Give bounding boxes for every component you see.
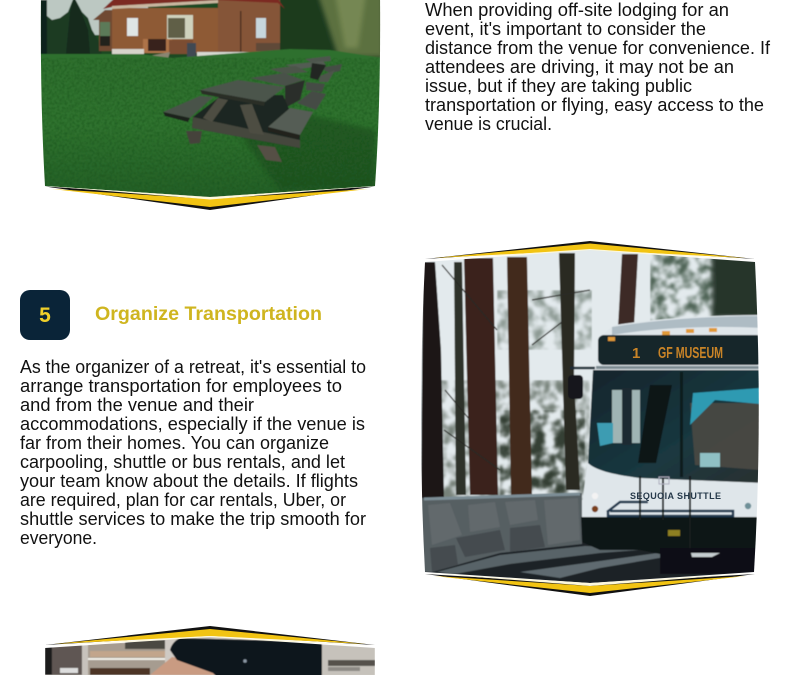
far picnic tables <box>250 56 342 110</box>
photo: shuttle bus among redwoods: GF MUSEUM <box>658 345 723 362</box>
text block: transportation: and from the venue and their <box>20 395 254 415</box>
background foliage <box>430 380 590 500</box>
stone wall <box>415 493 582 572</box>
photo: shuttle bus among redwoods <box>415 245 770 590</box>
text block: transportation: everyone. <box>20 528 97 548</box>
lodge <box>93 10 112 51</box>
number badge <box>20 290 70 340</box>
text block: off-site lodging: transportation or flying, easy access to the <box>425 95 764 115</box>
text block: off-site lodging: attendees are driving, it may not be an <box>425 57 734 77</box>
dark branches <box>442 265 590 470</box>
text block: transportation <box>20 357 366 548</box>
chevron: upper yellow band of bus photo <box>425 241 755 260</box>
text block: off-site lodging: venue is crucial. <box>425 114 552 134</box>
left trees <box>38 0 102 54</box>
head lamps <box>592 493 598 499</box>
text block: transportation: are required, plan for car rentals, Uber, or <box>20 490 346 510</box>
number badge: 5 <box>39 304 51 327</box>
text block: transportation: As the organizer of a retreat, it's essential to <box>20 357 366 377</box>
text block: off-site lodging: event, it's important to consider the <box>425 19 706 39</box>
text block: transportation: carpooling, shuttle or bus rentals, and let <box>20 452 345 472</box>
text block: off-site lodging: issue, but if they are taking public <box>425 76 692 96</box>
chevron: lower yellow band of lodge photo <box>45 186 375 210</box>
bumper <box>581 517 765 555</box>
text block: off-site lodging: When providing off-site lodging for an <box>425 0 729 20</box>
bus lettering: 1 <box>632 345 640 362</box>
text block: transportation: your team know about the details. If flights <box>20 471 358 491</box>
windshield <box>588 370 765 483</box>
redwood trunks <box>421 262 444 498</box>
text block: transportation: shuttle services to make the trip smooth for <box>20 509 366 529</box>
photo: shuttle bus among redwoods: SEQUOIA SHUTTLE <box>630 491 721 501</box>
photo: baker in kitchen <box>45 635 375 675</box>
mirror <box>570 367 595 369</box>
text block: transportation: accommodations, especially if the venue is <box>20 414 365 434</box>
bakery racks <box>45 645 52 675</box>
bus body <box>582 314 758 500</box>
road <box>425 541 738 583</box>
lawn <box>38 49 383 200</box>
chevron: upper yellow band of kitchen photo <box>45 626 375 646</box>
baker's dark apron <box>170 638 322 675</box>
heading: Organize Transportation: Organize Transportation <box>95 304 322 325</box>
text block: transportation: arrange transportation for employees to <box>20 376 342 396</box>
right shelves <box>322 645 375 675</box>
text block: transportation: far from their homes. You can organize <box>20 433 329 453</box>
text block: off-site lodging <box>425 0 771 134</box>
destination sign <box>598 335 763 365</box>
baker's arm <box>150 657 217 675</box>
sky <box>38 0 148 35</box>
chevron: lower yellow band of bus photo <box>425 573 755 596</box>
photo: lodge and picnic tables <box>38 0 383 200</box>
near picnic table <box>163 80 313 162</box>
lawn texture <box>38 58 383 200</box>
right trees <box>280 0 336 50</box>
text block: off-site lodging: distance from the venue for convenience. If <box>425 38 771 58</box>
bike rack <box>607 502 733 516</box>
roof lamps <box>608 328 717 341</box>
